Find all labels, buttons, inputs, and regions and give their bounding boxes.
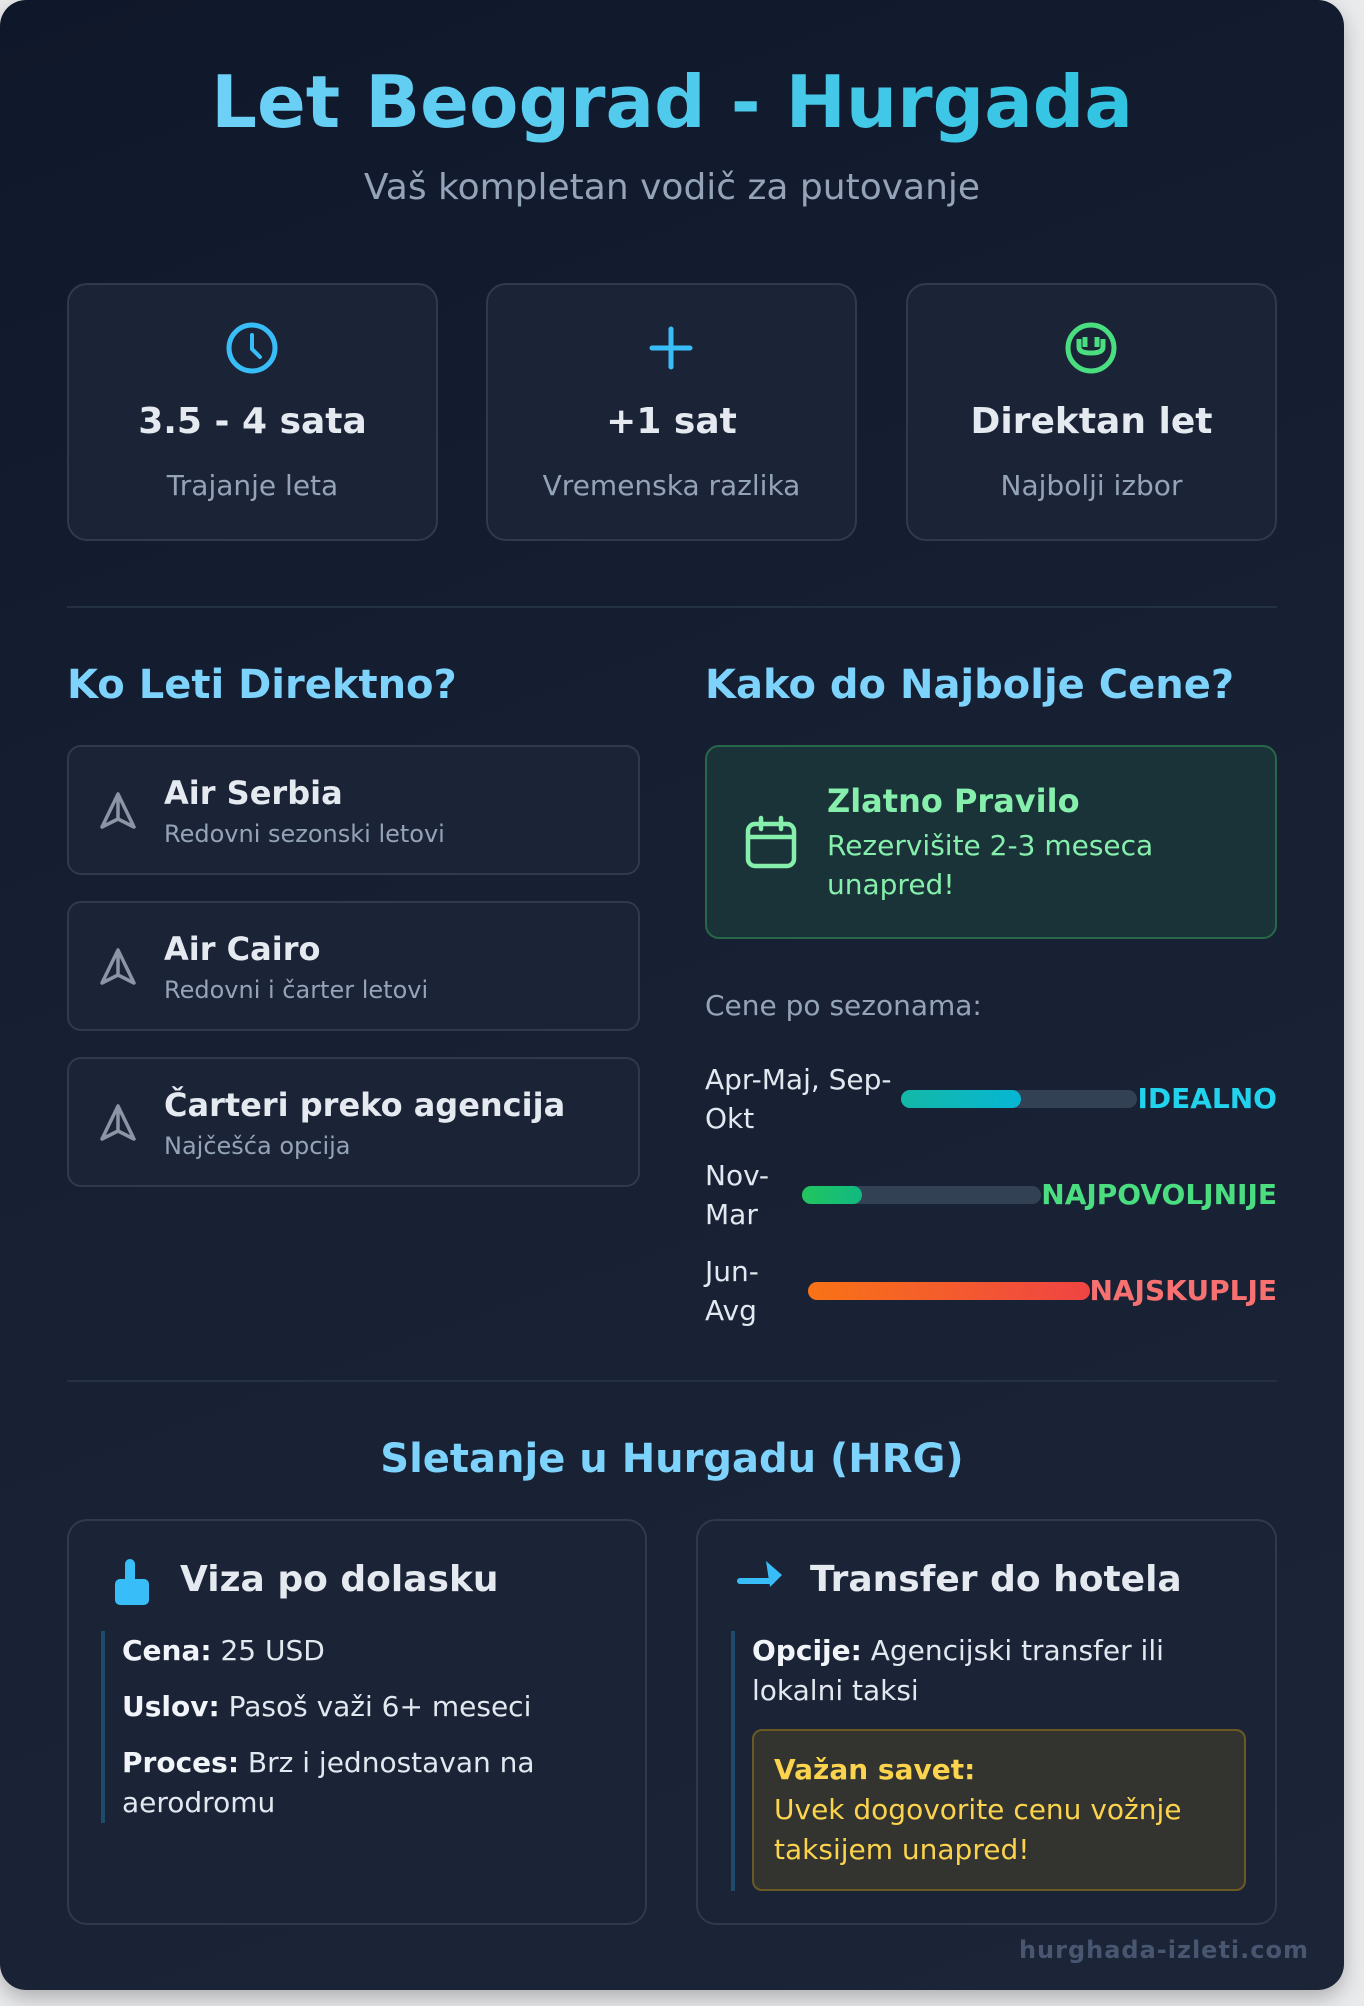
description: Redovni sezonski letovi [164, 820, 445, 848]
title: Transfer do hotela [810, 1559, 1182, 1600]
value: Direktan let [971, 401, 1212, 442]
heading: best price: Kako do Najbolje Cene? [705, 662, 1234, 708]
value: +1 sat [606, 401, 737, 442]
icon: clock [226, 322, 278, 374]
stat card: duration [67, 283, 438, 541]
airline card: charters [67, 1057, 640, 1187]
label: prices by season: Cene po sezonama: [705, 989, 982, 1022]
icon: plane [100, 948, 136, 985]
icon: plus [650, 326, 692, 370]
text: unapred! [827, 868, 955, 901]
panel: transfer [696, 1519, 1277, 1925]
description: Redovni i čarter letovi [164, 976, 428, 1004]
title: Zlatno Pravilo [827, 782, 1080, 820]
stat card: direct flight [906, 283, 1277, 541]
price row: ideal: IDEALNO [1137, 1082, 1277, 1115]
stat card: time difference [486, 283, 857, 541]
label: Trajanje leta [167, 469, 338, 502]
callout: important tip: Važan savet: [774, 1753, 975, 1786]
subtitle: Vaš kompletan vodič za putovanje [364, 167, 980, 208]
price row: ideal [705, 1063, 1277, 1135]
price row: most expensive: NAJSKUPLJE [1089, 1274, 1277, 1307]
label: Vremenska razlika [543, 469, 800, 502]
icon: visa [115, 1559, 149, 1605]
details: Cena: 25 USD [122, 1634, 325, 1667]
price row: most expensive: Avg [705, 1294, 757, 1327]
details: lokalni taksi [752, 1674, 919, 1707]
icon: plane [100, 792, 136, 829]
text [827, 829, 1153, 901]
price row: most expensive: Jun- [705, 1255, 759, 1288]
value: 3.5 - 4 sata [138, 401, 367, 442]
details: Proces: Brz i jednostavan na [122, 1746, 535, 1779]
title: Let Beograd - Hurgada [211, 60, 1133, 144]
icon: green badge [1066, 322, 1116, 374]
name: Čarteri preko agencija [164, 1086, 565, 1124]
airline card: Air Serbia [67, 745, 640, 875]
name: Air Serbia [164, 774, 343, 812]
golden rule box [705, 745, 1277, 939]
callout: important tip: taksijem unapred! [774, 1833, 1029, 1866]
details [731, 1631, 1251, 1891]
title: Viza po dolasku [180, 1559, 499, 1600]
price row: cheapest [705, 1159, 1277, 1231]
details [101, 1631, 631, 1823]
icon: plane [100, 1104, 136, 1141]
footer: website: hurghada-izleti.com [1019, 1936, 1309, 1964]
icon: calendar [746, 816, 796, 868]
price row: cheapest: Nov- [705, 1159, 769, 1192]
price row: cheapest: NAJPOVOLJNIJE [1041, 1178, 1277, 1211]
heading: direct airlines: Ko Leti Direktno? [67, 662, 457, 708]
price row: ideal: Okt [705, 1102, 754, 1135]
airline card: Air Cairo [67, 901, 640, 1031]
price row: cheapest: Mar [705, 1198, 758, 1231]
details: Opcije: Agencijski transfer ili [752, 1634, 1164, 1667]
details: Uslov: Pasoš važi 6+ meseci [122, 1690, 531, 1723]
description: Najčešća opcija [164, 1132, 350, 1160]
price row: ideal: Apr-Maj, Sep- [705, 1063, 892, 1096]
label: Najbolji izbor [1001, 469, 1182, 502]
callout: important tip [752, 1729, 1246, 1891]
heading: landing: Sletanje u Hurgadu (HRG) [380, 1436, 964, 1482]
name: Air Cairo [164, 930, 320, 968]
icon: arrow [737, 1561, 782, 1587]
panel: visa [67, 1519, 647, 1925]
callout: important tip: Uvek dogovorite cenu vožnje [774, 1793, 1181, 1826]
price row: most expensive [704, 1255, 1277, 1327]
text: Rezervišite 2-3 meseca [827, 829, 1153, 862]
details: aerodromu [122, 1786, 275, 1819]
title [0, 58, 1344, 146]
